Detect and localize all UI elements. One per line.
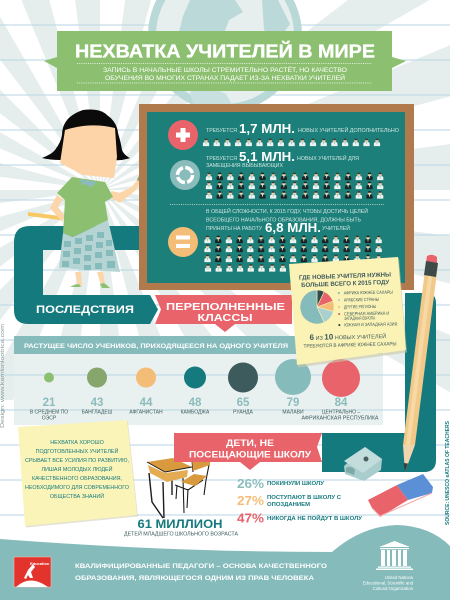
bubble chart: 84 [335,397,348,409]
pie legend: ДРУГИЕ РЕГИОНЫ [344,304,376,309]
text: 6.8 million: УЧИТЕЛЕЙ [322,224,350,232]
heading: out-of-school children: ДЕТИ, НЕ [226,438,274,449]
statistics: out-of-school children [237,477,363,526]
sticky note: lack of teachers: ПОДГОТОВЛЕННЫХ УЧИТЕЛЕЙ [36,447,119,455]
title banner [44,31,406,91]
text: 1.7 million: НОВЫХ УЧИТЕЛЕЙ ДОПОЛНИТЕЛЬНО [298,126,400,134]
bubble chart: АФГАНИСТАН [129,410,163,416]
text: 6.8 million: ВСЕОБЩЕГО НАЧАЛЬНОГО ОБРАЗОВАНИЯ, ДОЛЖНЫ БЫТЬ [206,218,361,224]
heading: consequences: ПОСЛЕДСТВИЯ [36,304,134,316]
icon: school desk and chair [147,456,211,518]
text: 5.1 million: ТРЕБУЕТСЯ [206,156,237,162]
note callout: 6 of 10 [303,331,397,350]
globe [148,0,302,112]
icon: eraser [368,474,433,517]
text: 5.1 million [206,149,359,169]
sticky note: where new teachers are needed [289,257,407,368]
blackboard [139,104,414,290]
bubble chart: 44 [140,397,153,409]
pie legend: ЮЖНАЯ И ЗАПАДНАЯ АЗИЯ [344,322,397,327]
pie legend: АРАБСКИЕ СТРАНЫ [344,297,379,302]
text: 61 million: 61 МИЛЛИОН [138,519,222,531]
statistics: out-of-school children: ОПОЗДАНИЕМ [267,502,311,508]
statistics: out-of-school children: 47% [237,512,264,526]
text: 6.8 million [206,207,368,235]
bubble chart: ЦЕНТРАЛЬНО – [322,410,360,416]
text: 1.7 million [206,121,400,136]
sticky note: lack of teachers: СРЫВАЕТ ВСЕ УСИЛИЯ ПО РАЗВИТИЮ, [25,458,129,464]
bubble chart: 65 [237,397,250,409]
heading: overcrowded classes: ПЕРЕПОЛНЕННЫЕ [166,301,285,313]
teal framing band right [322,293,436,472]
footer logo: Education [30,561,50,566]
bubble chart: КАМБОДЖА [181,410,210,416]
bubble chart: 21 [43,397,56,409]
bubble chart: ОЭСР [42,416,57,422]
bubble chart: МАЛАВИ [282,410,304,416]
bubble chart: 48 [189,397,202,409]
pie legend: АФРИКА ЮЖНЕЕ САХАРЫ [344,290,393,295]
bubble chart [30,359,379,422]
UNESCO text [363,575,414,591]
bubble chart: БАНГЛАДЕШ [82,410,113,416]
statistics: out-of-school children: НИКОГДА НЕ ПОЙДУТ В ШКОЛУ [267,514,363,522]
sticky note: lack of teachers: НЕХВАТКА ХОРОШО [50,440,104,446]
text: 6.8 million: 6,8 МЛН. [265,220,321,235]
teal framing band left [14,226,160,324]
pie legend [338,290,397,328]
people row: 1.7 million [203,138,380,146]
statistics: out-of-school children: ПОКИНУЛИ ШКОЛУ [267,481,325,487]
heading: overcrowded classes: КЛАССЫ [198,312,252,324]
icon: plus [168,120,198,150]
bubble chart: АФРИКАНСКАЯ РЕСПУБЛИКА [302,416,379,422]
note callout: 6 of 10: ТРЕБУЮТСЯ В АФРИКЕ ЮЖНЕЕ САХАРЫ [304,341,397,350]
heading: overcrowded classes [155,295,292,332]
heading: out-of-school children: ПОСЕЩАЮЩИЕ ШКОЛУ [189,450,311,460]
footer band [0,525,450,600]
title banner: ОБУЧЕНИЯ ВО МНОГИХ СТРАНАХ ПАДАЕТ ИЗ-ЗА НЕХВАТКИ УЧИТЕЛЕЙ [105,74,345,82]
statistics: out-of-school children: 26% [237,477,264,491]
footer slogan: КВАЛИФИЦИРОВАННЫЕ ПЕДАГОГИ – ОСНОВА КАЧЕСТВЕННОГО [75,563,327,570]
UNESCO text: Educational, Scientific and [363,580,414,586]
sticky note: lack of teachers [18,420,138,528]
chart heading: РАСТУЩЕЕ ЧИСЛО УЧЕНИКОВ, ПРИХОДЯЩЕЕСЯ НА ОДНОГО УЧИТЕЛЯ [24,343,288,350]
UNESCO temple logo [376,541,413,570]
text: 61 million: ДЕТЕЙ МЛАДШЕГО ШКОЛЬНОГО ВОЗРАСТА [124,530,239,538]
bubble chart: 43 [91,397,103,409]
sticky note: lack of teachers: ЛИШАЯ МОЛОДЫХ ЛЮДЕЙ [42,465,113,473]
text: 5.1 million: НОВЫХ УЧИТЕЛЕЙ ДЛЯ [297,154,359,162]
subtitle: ЗАПИСЬ В НАЧАЛЬНЫЕ ШКОЛЫ СТРЕМИТЕЛЬНО РАСТЁТ, НО КАЧЕСТВО [103,67,347,74]
text: 61 million [124,519,239,538]
text: 6.8 million: В ОБЩЕЙ СЛОЖНОСТИ, К 2015 ГОДУ, ЧТОБЫ ДОСТИЧЬ ЦЕЛЕЙ [206,207,368,215]
text: 1.7 million: 1,7 МЛН. [239,121,295,136]
bubble chart: 79 [287,397,299,409]
sticky note: lack of teachers: ОБЩЕСТВА ЗНАНИЙ [50,492,104,500]
note heading [299,271,391,289]
icon: pencil [403,255,438,472]
title: НЕХВАТКА УЧИТЕЛЕЙ В МИРЕ [75,40,375,62]
icon: recycle [170,160,200,190]
people rows: 6.8 million [204,235,382,272]
UNESCO text: Cultural Organization [373,586,414,591]
note heading: БОЛЬШЕ ВСЕГО К 2015 ГОДУ [301,279,389,289]
design credit: Design: www.kamlonlootrica.com [0,323,6,428]
pie legend: ЗАПАДНАЯ ЕВРОПА [344,315,376,321]
statistics: out-of-school children: ПОСТУПАЮТ В ШКОЛУ С [267,495,341,501]
footer logo [14,557,51,587]
sticky note: lack of teachers: НЕОБХОДИМОГО ДЛЯ СОВРЕМЕННОГО [25,485,129,491]
footer band: ОБРАЗОВАНИЯ, ЯВЛЯЮЩЕГОСЯ ОДНИМ ИЗ ПРАВ ЧЕЛОВЕКА [75,575,314,582]
text: 1.7 million: ТРЕБУЕТСЯ [206,128,237,134]
people rows: 5.1 million [206,172,383,199]
heading: out-of-school children [174,433,322,470]
teacher illustration [28,110,146,288]
pie chart [300,290,334,324]
panel: overcrowded classes chart [14,336,402,425]
bubble chart: РУАНДА [233,410,254,416]
bubble chart: В СРЕДНЕМ ПО [30,410,68,416]
note callout: 6 of 10: 6 ИЗ 10 НОВЫХ УЧИТЕЛЕЙ [309,331,386,342]
text: 5.1 million: ЗАМЕЩЕНИЯ ВЫБЫВАЮЩИХ [206,163,283,169]
UNESCO text: United Nations [385,575,413,580]
sticky note: lack of teachers: КАЧЕСТВЕННОГО ОБРАЗОВАНИЯ, [32,476,123,482]
statistics: out-of-school children: 27% [237,494,264,508]
icon: equals [168,227,198,257]
pie legend: СЕВЕРНАЯ АМЕРИКА И [344,311,389,316]
note heading: ГДЕ НОВЫЕ УЧИТЕЛЯ НУЖНЫ [299,271,391,282]
text: 5.1 million: 5,1 МЛН. [239,149,295,164]
icon: sharpener [344,447,382,481]
text: 6.8 million: ПРИНЯТЫ НА РАБОТУ [206,226,262,232]
